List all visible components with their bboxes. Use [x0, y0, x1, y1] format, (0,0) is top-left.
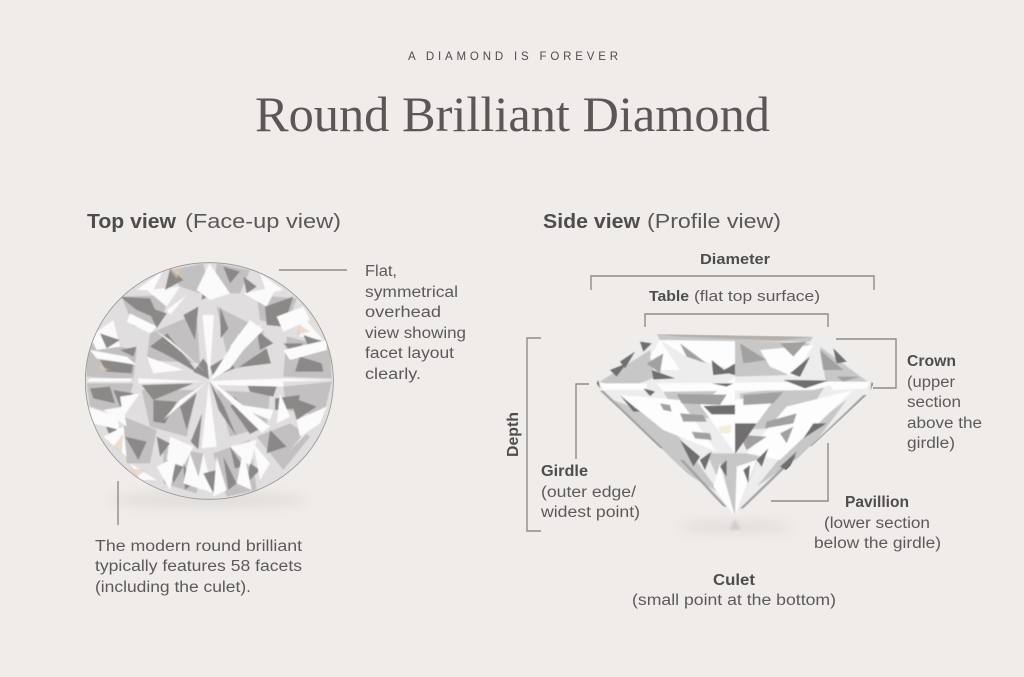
- label: pavillion: below the girdle): [814, 535, 941, 552]
- callout: flat symmetrical: symmetrical: [365, 284, 458, 301]
- label: pavillion: (lower section: [824, 515, 930, 532]
- callout: 58 facets: (including the culet).: [95, 579, 251, 596]
- label: diameter: [591, 252, 874, 290]
- label: crown: above the: [907, 415, 982, 432]
- callout: flat symmetrical: clearly.: [365, 366, 421, 383]
- label: culet: [632, 572, 836, 609]
- heading: top view: Top view: [87, 211, 176, 233]
- shadow under top diamond: [109, 493, 309, 507]
- label: girdle: widest point): [540, 504, 640, 521]
- label: table: Table: [649, 289, 689, 305]
- label: crown: section: [907, 394, 961, 411]
- label: girdle: (outer edge/: [541, 484, 637, 501]
- label: depth: Depth: [505, 412, 522, 457]
- callout: flat symmetrical: [279, 263, 466, 383]
- callout: flat symmetrical: view showing: [365, 325, 466, 342]
- label: diameter: Diameter: [700, 252, 770, 268]
- heading: side view: Side view: [543, 211, 640, 233]
- label: crown: (upper: [907, 374, 955, 391]
- label: girdle: [540, 384, 640, 521]
- callout: flat symmetrical: facet layout: [365, 345, 455, 362]
- callout: flat symmetrical: overhead: [365, 304, 441, 321]
- heading: top view: [87, 211, 341, 233]
- label: depth: [505, 338, 541, 531]
- label: girdle: Girdle: [541, 463, 588, 480]
- icon: diamond top view: [83, 260, 337, 503]
- label: crown: Crown: [907, 353, 956, 370]
- icon: diamond side view: [595, 334, 873, 517]
- heading: side view: [543, 211, 781, 233]
- callout: flat symmetrical: Flat,: [365, 263, 397, 280]
- callout: 58 facets: [95, 481, 303, 596]
- label: pavillion: Pavillion: [845, 494, 909, 511]
- heading: side view: (Profile view): [647, 211, 781, 233]
- label: pavillion: [771, 443, 941, 552]
- label: culet: (small point at the bottom): [632, 592, 836, 609]
- label: table: (flat top surface): [694, 289, 820, 305]
- eyebrow text: A DIAMOND IS FOREVER: [408, 51, 618, 63]
- label: table: [645, 289, 828, 327]
- shadow under side diamond: [677, 519, 793, 531]
- label: crown: girdle): [907, 435, 955, 452]
- callout: 58 facets: The modern round brilliant: [95, 538, 303, 555]
- title: Round Brilliant Diamond: [255, 86, 770, 142]
- panel: side view: [505, 211, 982, 609]
- panel: top view: [83, 211, 466, 596]
- label: culet: Culet: [713, 572, 755, 589]
- callout: 58 facets: typically features 58 facets: [95, 558, 302, 575]
- heading: top view: (Face-up view): [185, 211, 341, 233]
- label: crown: [836, 339, 982, 452]
